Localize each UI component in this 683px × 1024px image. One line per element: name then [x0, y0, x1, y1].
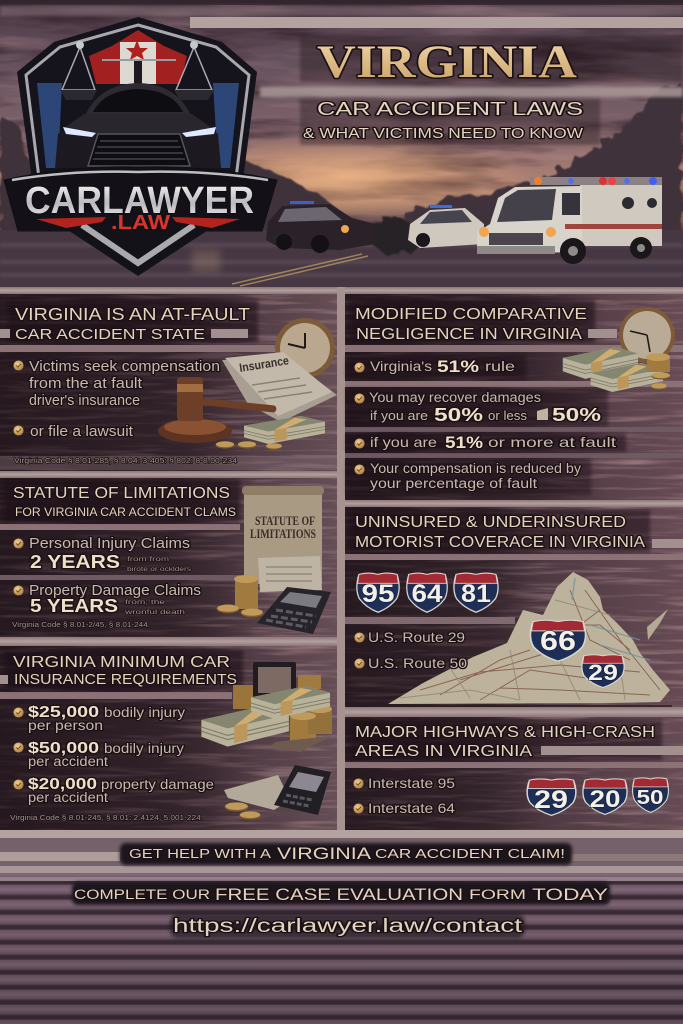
shield: 64: 64 [412, 580, 443, 608]
rule: 51 percent or more [370, 433, 616, 452]
flag [89, 30, 187, 84]
requirement: 50000: bodily injury [104, 741, 184, 756]
icon: insurance document: Insurance [238, 353, 290, 375]
crash debris [372, 214, 424, 255]
heading line 2: FOR VIRGINIA CAR ACCIDENT CLAMS [15, 507, 236, 519]
help backing [120, 843, 572, 865]
icon: clock [619, 307, 675, 363]
shield: 95: 95 [362, 580, 395, 608]
requirement: 20000: per accident [28, 790, 108, 805]
requirement: 20000: $20,000 [28, 776, 97, 793]
shield: 20 [583, 779, 627, 814]
text block: victims: Victims seek compensation [29, 358, 220, 375]
evaluation message: COMPLETE OUR [74, 887, 210, 902]
icon: clock [275, 318, 335, 378]
wet road [0, 230, 683, 290]
rule: 51 percent: rule [485, 358, 515, 374]
bullet [354, 393, 365, 404]
evaluation message: FORM [469, 887, 526, 902]
heading stub [0, 675, 8, 684]
text block: victims [29, 358, 220, 409]
panel: major highways [350, 720, 683, 816]
url backing [170, 914, 525, 938]
heading line 1: MAJOR HIGHWAYS & HIGH-CRASH [355, 724, 655, 741]
text: interstate 95: Interstate 95 [368, 775, 455, 791]
panel: minimum insurance [0, 650, 332, 822]
shield: 29: 29 [588, 660, 618, 685]
text: property damage: Property Damage Claims [29, 583, 201, 599]
icon: coins [225, 802, 261, 820]
requirement: 50000 [28, 740, 184, 769]
note: 5 years: wronful death [123, 609, 186, 616]
shield: 64 [407, 573, 447, 612]
note: 2 years: birote or ocklders [127, 566, 192, 573]
shield: 81 [454, 573, 498, 612]
icon: gavel [158, 377, 277, 443]
text: or file a lawsuit: or file a lawsuit [30, 423, 134, 440]
contact url: https://carlawyer.law/contact [173, 916, 523, 937]
dark heading backing [4, 480, 240, 522]
evaluation message [74, 885, 608, 904]
icon: scroll [242, 486, 324, 592]
title: Virginia: VIRGINIA [317, 36, 577, 88]
requirement: 50000: per accident [28, 754, 108, 769]
bullet [354, 438, 365, 449]
top hero bands [0, 0, 683, 5]
hills and trees [0, 84, 683, 240]
rule: recover damages: or less [488, 408, 528, 423]
rule: reduced compensation: Your compensation is reduced by [370, 461, 581, 476]
requirement: 25000: bodily injury [104, 705, 185, 720]
heading stub [652, 539, 683, 548]
subtitle: what victims need to know: & WHAT VICTIMS NEED TO KNOW [303, 126, 583, 142]
logo: CarLawyer.law shield [4, 17, 277, 276]
heading line 2: CAR ACCIDENT STATE [15, 326, 205, 343]
lower shield tip [60, 225, 216, 276]
shield: 95 [357, 573, 399, 612]
heading line 2: MOTORIST COVERACE IN VIRGINIA [355, 534, 645, 551]
requirement: 25000: per person [28, 718, 103, 733]
help message: VIRGINIA [277, 844, 372, 863]
rule: recover damages: if you are [370, 408, 428, 423]
note: 5 years [123, 599, 186, 616]
icon: scroll: STATUTE OF [255, 513, 315, 528]
icon: calculator [257, 587, 331, 634]
note: 2 years: from from [127, 556, 169, 563]
dark row backing [346, 355, 526, 379]
dark heading backing [350, 510, 650, 552]
shield: 20: 20 [590, 786, 620, 813]
subtitle: car accident laws: CAR ACCIDENT LAWS [317, 99, 583, 119]
rule: 51 percent: Virginia's [370, 358, 432, 374]
structural strips [0, 287, 683, 832]
bullet [354, 658, 365, 669]
help message: GET HELP WITH A [129, 846, 271, 861]
evaluation backing [72, 882, 610, 905]
bullet [354, 464, 365, 475]
panel: statute of limitations [4, 480, 331, 634]
icon: coin stacks [233, 675, 332, 741]
road centre line [232, 254, 368, 286]
logo .LAW: .LAW [111, 212, 170, 234]
rule: recover damages [369, 390, 601, 425]
bullet [13, 779, 24, 790]
heading stub [541, 746, 683, 755]
shield: 29: 29 [534, 786, 568, 814]
evaluation message: TODAY [532, 885, 608, 904]
icon: tablet [253, 662, 296, 698]
hero scene [0, 0, 683, 290]
bullet [13, 360, 24, 371]
text block: victims: driver's insurance [29, 392, 140, 409]
heading line 1: UNINSURED & UNDERINSURED [355, 514, 626, 531]
bullet [353, 778, 364, 789]
citation: Virginia Code § 8.01-2/45, § 8.01-244. [12, 620, 150, 629]
bullet [13, 425, 24, 436]
note: 2 years [127, 556, 192, 573]
heading line 2: INSURANCE REQUIREMENTS [14, 671, 237, 688]
shield body [17, 17, 257, 180]
shield: 29 [527, 779, 576, 815]
rule: 51 percent or more: 51% [445, 433, 483, 452]
panels backing [0, 294, 683, 830]
text: route 29: U.S. Route 29 [368, 629, 465, 645]
icon: coins [216, 441, 282, 450]
red wings [36, 217, 240, 228]
bullet [353, 803, 364, 814]
requirement: 25000: $25,000 [28, 704, 99, 721]
icon: phone [274, 765, 331, 815]
text: interstate 64: Interstate 64 [368, 800, 455, 816]
rule: recover damages: 50% [552, 405, 601, 425]
footer call to action [0, 830, 683, 1024]
dark row backing [346, 433, 626, 452]
bullet [354, 632, 365, 643]
scales of justice [62, 47, 212, 90]
requirement: 20000: property damage [101, 777, 214, 792]
map: Virginia [385, 572, 672, 706]
shield: 66: 66 [540, 625, 576, 656]
note: 5 years: from; the [125, 599, 166, 606]
help message: CAR ACCIDENT CLAIM! [375, 846, 565, 861]
value: 2 years: 2 YEARS [30, 552, 120, 572]
panel: at-fault state [0, 300, 337, 465]
panel: uninsured and underinsured [350, 510, 683, 706]
icon: insurance document [222, 352, 337, 422]
banner [4, 167, 277, 231]
dark row backing [346, 459, 591, 495]
bullet [354, 362, 365, 373]
police car left [266, 201, 375, 253]
police car right [408, 205, 484, 248]
road reflection [192, 250, 220, 272]
citation: Virginia Code § 8.01-285, § 8.04: 3-405: § 802: 8-8.00-234 [14, 456, 237, 465]
icon: papers [224, 775, 290, 810]
citation: Virginia Code § 8.01-245, § 8.01: 2.4124, 5.001-224. [10, 813, 203, 822]
icon: money [244, 416, 325, 444]
value: 5 years: 5 YEARS [30, 596, 118, 616]
requirement: 20000 [28, 776, 214, 805]
panel: modified comparative negligence [346, 300, 675, 495]
footer stripes [0, 830, 683, 1024]
heading stub [588, 329, 617, 338]
rule: 51 percent [370, 357, 515, 376]
heading line 2: NEGLIGENCE IN VIRGINIA [356, 326, 582, 343]
logo wordmark: CARLAWYER [25, 180, 254, 222]
rule: 51 percent or more: or more at fault [488, 434, 616, 450]
shield: 29 [582, 655, 624, 688]
icon: cash stacks [201, 686, 332, 752]
icon: coin stack [217, 575, 263, 617]
bullet [13, 707, 24, 718]
shield: 66 [530, 620, 586, 661]
heading line 1: VIRGINIA MINIMUM CAR [13, 654, 230, 671]
heading stubs [0, 329, 248, 338]
bullet [13, 585, 24, 596]
ambulance [477, 177, 662, 264]
text: route 50: U.S. Route 50 [368, 655, 467, 671]
rule: recover damages: 50% [434, 405, 483, 425]
dark heading backing [350, 720, 662, 760]
dark heading backing [350, 300, 595, 342]
shield: 50 [633, 778, 668, 812]
requirement: 50000: $50,000 [28, 740, 99, 757]
rule: reduced compensation [370, 461, 581, 491]
dark row backing [346, 388, 608, 426]
heading line 1: STATUTE OF LIMITATIONS [13, 485, 230, 502]
heading line 1: MODIFIED COMPARATIVE [355, 306, 587, 323]
heading line 1: VIRGINIA IS AN AT-FAULT [15, 304, 250, 324]
rule: 51 percent: 51% [437, 357, 479, 376]
text block: victims: from the at fault [29, 375, 143, 392]
heading line 2: AREAS IN VIRGINIA [355, 743, 533, 760]
dark heading backing [5, 650, 243, 690]
icon: scroll: LIMITATIONS [250, 526, 316, 541]
rule: reduced compensation: your percentage of fault [370, 476, 537, 491]
evaluation message: FREE CASE EVALUATION [215, 885, 463, 904]
bullet [13, 742, 24, 753]
icon: cash and coins [563, 347, 670, 392]
requirement: 25000 [28, 704, 185, 733]
dark heading backing [8, 300, 258, 342]
rule: 51 percent or more: if you are [370, 434, 437, 450]
star [126, 40, 148, 60]
shield: 81: 81 [461, 580, 491, 608]
bullet [13, 538, 24, 549]
text: personal injury: Personal Injury Claims [29, 536, 190, 552]
rule: recover damages: You may recover damages [369, 390, 541, 405]
blue side panels [37, 83, 239, 168]
car front [84, 83, 192, 118]
help message [129, 844, 565, 863]
shield: 50: 50 [636, 787, 664, 809]
